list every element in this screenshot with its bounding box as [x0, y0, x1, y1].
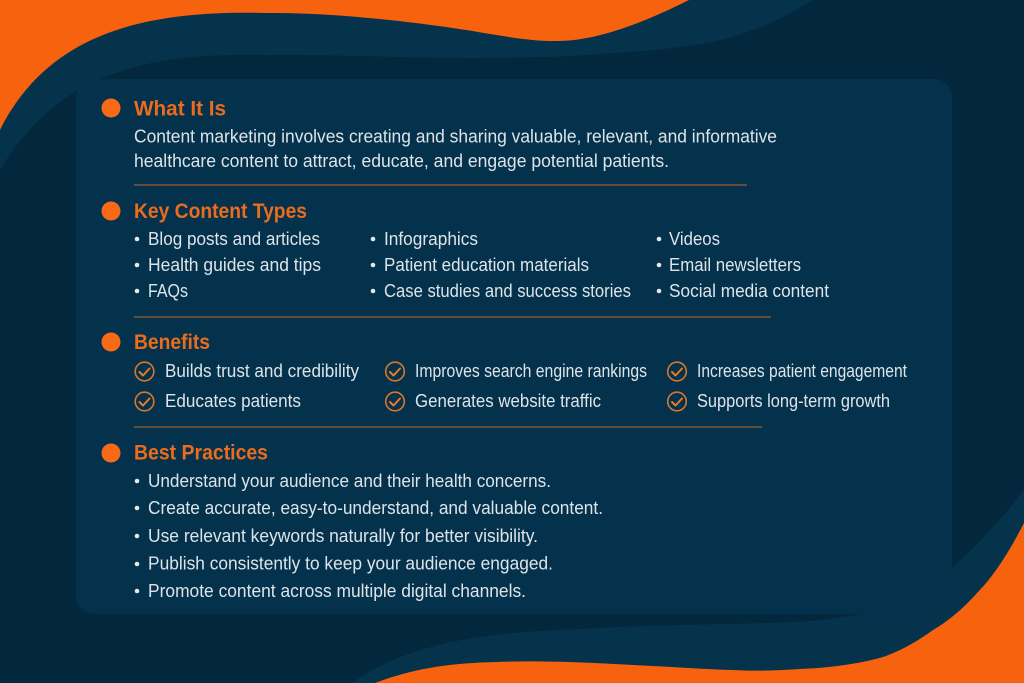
list column 3: Social media content	[669, 281, 829, 301]
section: Benefits	[102, 330, 907, 427]
list column 1	[135, 229, 321, 301]
list column 2: Patient education materials	[384, 255, 589, 275]
heading: What It Is	[134, 96, 226, 120]
list column 1: Health guides and tips	[148, 255, 321, 275]
heading: Best Practices	[134, 440, 268, 464]
section marker	[102, 98, 120, 118]
practices list: Promote content across multiple digital channels.	[148, 581, 526, 601]
list column 1: Blog posts and articles	[148, 229, 320, 249]
description	[134, 126, 777, 171]
list column 3	[657, 229, 829, 301]
benefit: search rankings: Improves search engine rankings	[415, 361, 647, 381]
practices list: Understand your audience and their health concerns.	[148, 471, 551, 491]
list column 3: Email newsletters	[669, 255, 801, 275]
practices list: Create accurate, easy-to-understand, and valuable content.	[148, 498, 603, 518]
heading: Benefits	[134, 330, 210, 354]
wave: top band	[0, 0, 812, 170]
benefit: patient engagement: Increases patient engagement	[697, 361, 907, 381]
benefit: builds trust: Builds trust and credibility	[165, 361, 359, 381]
list column 1: FAQs	[148, 281, 188, 301]
description: healthcare content to attract, educate, and engage potential patients.	[134, 151, 669, 171]
wave: bottom orange	[375, 523, 1024, 683]
section marker	[102, 444, 120, 462]
section marker	[102, 202, 120, 220]
benefit: educates patients: Educates patients	[165, 391, 301, 411]
list column 2: Infographics	[384, 229, 478, 249]
benefit: website traffic: Generates website traffic	[415, 391, 601, 411]
section: Best Practices	[102, 440, 603, 601]
content panel	[76, 79, 952, 614]
practices list: Publish consistently to keep your audience engaged.	[148, 554, 553, 574]
list column 2	[371, 229, 631, 301]
practices list: Use relevant keywords naturally for better visibility.	[148, 526, 538, 546]
description: Content marketing involves creating and sharing valuable, relevant, and informative	[134, 126, 777, 146]
list column 2: Case studies and success stories	[384, 281, 631, 301]
section marker	[102, 332, 120, 352]
benefit: long-term growth: Supports long-term growth	[697, 391, 890, 411]
list column 3: Videos	[669, 229, 720, 249]
heading: Key Content Types	[134, 199, 307, 223]
section: What It Is	[102, 96, 777, 185]
section: Key Content Types	[102, 199, 829, 317]
practices list	[135, 471, 603, 601]
wave: bottom band	[352, 490, 1024, 683]
wave: top orange	[0, 0, 689, 130]
